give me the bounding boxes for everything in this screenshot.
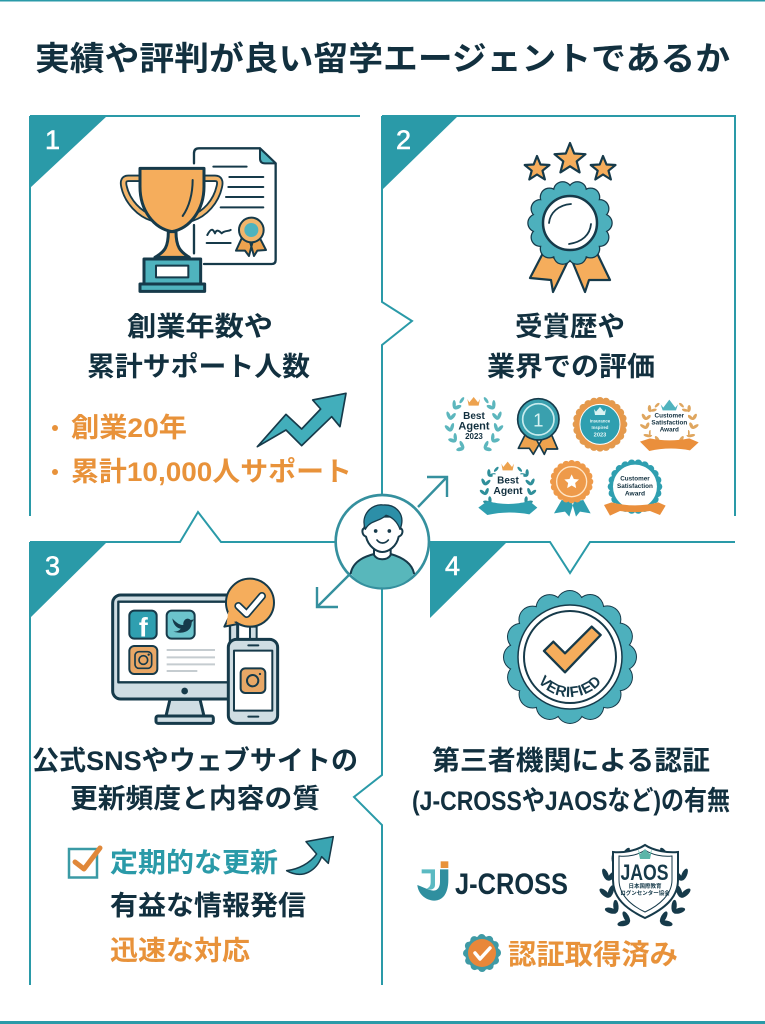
badge: scalloped teal seal: Inspired bbox=[592, 425, 609, 430]
bullet list 1: 創業20年 bbox=[71, 413, 187, 443]
logo: JAOS shield bbox=[598, 845, 692, 927]
badge: best agent ribbon: Best bbox=[497, 475, 519, 486]
badge: best agent 2023 bbox=[444, 396, 504, 452]
panel frame lines bbox=[30, 116, 735, 985]
certified label: 認証取得済み bbox=[508, 939, 678, 970]
heading 2: 業界での評価 bbox=[487, 352, 655, 382]
badge: customer satisfaction award: Satisfaction bbox=[651, 419, 687, 426]
badge: best agent ribbon: Agent bbox=[493, 486, 523, 497]
number tab 4 bbox=[430, 542, 507, 618]
bullet list 1: 累計10,000人サポート bbox=[71, 457, 352, 487]
heading 1: 創業年数や bbox=[127, 312, 273, 342]
icon: verified seal: VERIFIED bbox=[540, 674, 600, 698]
icon: rosette with stars bbox=[525, 143, 616, 292]
logo: JAOS shield: JAOS bbox=[620, 860, 668, 885]
number tab 1: 1 bbox=[45, 125, 60, 155]
center hub: person with arrows bbox=[317, 477, 447, 607]
heading 1: 累計サポート人数 bbox=[87, 352, 310, 382]
number tab 3: 3 bbox=[45, 551, 60, 581]
badge: number one ribbon: 1 bbox=[533, 409, 544, 430]
number tab 1 bbox=[30, 116, 107, 188]
heading 3: 更新頻度と内容の質 bbox=[70, 784, 320, 814]
badge: best agent 2023: Agent bbox=[458, 421, 490, 433]
badge: number one ribbon bbox=[518, 399, 559, 454]
logo: J-CROSS: J-CROSS bbox=[455, 868, 568, 901]
arrow: rising trend bbox=[257, 393, 346, 447]
panel 3: social media bbox=[30, 542, 358, 966]
heading 2 bbox=[487, 312, 655, 382]
title: 実績や評判が良い留学エージェントであるか bbox=[35, 40, 730, 77]
badge: customer satisfaction award 2: Customer bbox=[620, 476, 650, 483]
bullet list 1 bbox=[52, 413, 352, 487]
icon: trophy and certificate bbox=[124, 148, 276, 291]
checklist: 有益な情報発信 bbox=[110, 891, 306, 921]
badge: customer satisfaction award 2: Satisfaction bbox=[617, 483, 653, 490]
checklist bbox=[110, 848, 306, 966]
badge: best agent 2023: Best bbox=[463, 411, 485, 422]
icon: monitor and phone bbox=[113, 579, 278, 723]
badge: scalloped teal seal: Insurance bbox=[590, 418, 611, 423]
badge: customer satisfaction award 2: Award bbox=[625, 490, 645, 497]
icon: monitor and phone: f bbox=[139, 613, 148, 643]
badge: scalloped teal seal bbox=[576, 400, 624, 448]
number tab 2: 2 bbox=[396, 125, 411, 155]
number tab 3 bbox=[30, 542, 107, 618]
number tab 4: 4 bbox=[445, 551, 460, 581]
logo: J-CROSS bbox=[417, 861, 568, 901]
heading 1 bbox=[87, 312, 310, 382]
badge: customer satisfaction award bbox=[639, 400, 699, 451]
badge: best agent ribbon bbox=[478, 462, 537, 515]
heading 4: 第三者機関による認証 bbox=[432, 746, 710, 776]
badge: customer satisfaction award: Award bbox=[660, 427, 679, 434]
arrow: swoosh bbox=[287, 837, 333, 874]
logo: JAOS shield: 日本国際教育 bbox=[628, 882, 662, 890]
panel 1: track record bbox=[30, 116, 352, 487]
award badges bbox=[444, 396, 699, 517]
person icon bbox=[336, 495, 429, 588]
icon: checkbox bbox=[69, 848, 100, 878]
logo: JAOS shield: ログンセンター協会 bbox=[620, 889, 670, 897]
badge: customer satisfaction award: Customer bbox=[655, 413, 685, 420]
checklist: 定期的な更新 bbox=[110, 848, 278, 878]
heading 3: 公式SNSやウェブサイトの bbox=[32, 745, 358, 776]
heading 4 bbox=[412, 746, 730, 816]
number tab 2 bbox=[382, 116, 458, 190]
badge: customer satisfaction award 2 bbox=[604, 462, 666, 516]
heading 3 bbox=[32, 745, 358, 814]
badge: scalloped teal seal: 2023 bbox=[594, 432, 606, 438]
arrows bbox=[317, 477, 447, 607]
panel 4: certification bbox=[412, 543, 730, 972]
heading 2: 受賞歴や bbox=[515, 312, 625, 342]
panel 2: awards bbox=[382, 116, 699, 517]
hub connectors bbox=[336, 496, 430, 590]
badge: best agent 2023: 2023 bbox=[465, 432, 483, 441]
checklist: 迅速な対応 bbox=[110, 936, 250, 966]
icon: verified seal bbox=[503, 590, 637, 724]
badge: star ribbon bbox=[552, 462, 591, 517]
